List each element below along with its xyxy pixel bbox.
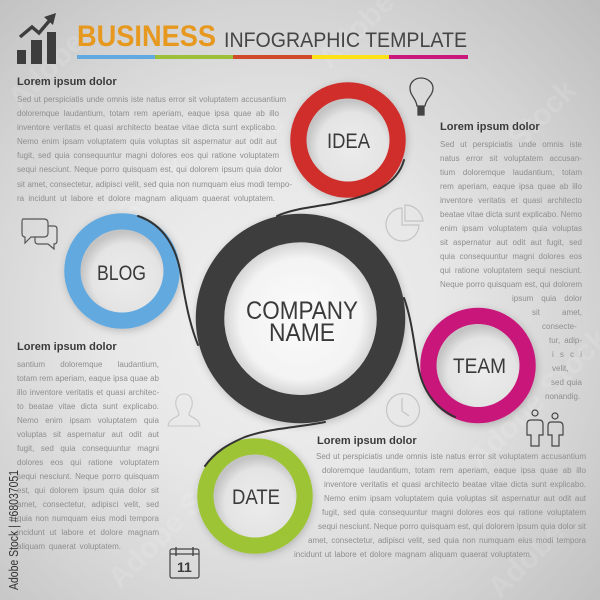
text block: top right: consecte- xyxy=(542,322,577,331)
text block: lower right xyxy=(294,452,586,559)
text block: lower left: est, qui dolorem ipsum quia dolor sit xyxy=(17,486,159,495)
text block: lower right: doloremque laudantium, totam rem aperiam, eaque ipsa quae ab illo xyxy=(322,466,586,475)
text block: lower right: sequi nesciunt. Neque porro quisquam est, qui dolorem ipsum quia dolor sit xyxy=(318,522,586,531)
text block: top right xyxy=(440,140,582,401)
text block: top left: Nemo enim ipsam voluptatem quia voluptas sit aspernatur aut odit aut xyxy=(17,137,277,146)
text block: top right: sit amet, xyxy=(532,308,582,317)
text block: top right: rem aperiam, eaque ipsa quae ab illo xyxy=(440,182,582,191)
central ring: company name: NAME xyxy=(269,319,335,347)
text block: lower left: amet, consectetur, adipisci velit, sed xyxy=(17,500,159,509)
text block: lower left: to beatae vitae dicta sunt explicabo. xyxy=(17,402,159,411)
text block: top right: sed quia xyxy=(551,378,582,387)
ring: idea: IDEA xyxy=(327,130,370,153)
text block: lower right: Sed ut perspiciatis unde omnis iste natus error sit voluptatem accusantium xyxy=(316,452,586,461)
central ring: company name xyxy=(210,228,391,409)
text block: lower right: incidunt ut labore et dolore magnam aliquam quaerat voluptatem. xyxy=(294,550,532,559)
ring: date xyxy=(206,446,304,546)
text block: top right: tur, adip- xyxy=(549,336,582,345)
watermark: Adobe Stock xyxy=(102,442,255,595)
watermark: Adobe Stock xyxy=(262,272,415,425)
text block: top right: beatae vitae dicta sunt explicabo. Nemo xyxy=(440,210,582,219)
text block: top left: sit amet, consectetur, adipisci velit, sed quia non numquam eius modi tempo- xyxy=(17,180,292,189)
ring: idea xyxy=(298,90,398,190)
icon: light bulb xyxy=(410,78,433,115)
icon: chart logo xyxy=(17,13,56,64)
text block: top right: natus error sit voluptatem accusan- xyxy=(440,154,582,163)
heading: top left: Lorem ipsum dolor xyxy=(17,76,117,88)
ring: blog: BLOG xyxy=(97,262,146,285)
text block: lower left: fugit, sed quia consequuntur magni xyxy=(17,444,159,453)
text block: top left: doloremque laudantium, totam rem aperiam, eaque ipsa quae ab illo xyxy=(17,109,279,118)
text block: top right: enim ipsam voluptatem quia voluptas xyxy=(440,224,582,233)
text block: lower left: sequi nesciunt. Neque porro quisquam xyxy=(17,472,159,481)
heading: top right: Lorem ipsum dolor xyxy=(440,121,540,133)
text block: lower left xyxy=(17,360,159,551)
text block: lower right: amet, consectetur, adipisci velit, sed quia non numquam eius modi tempora xyxy=(308,536,586,545)
text block: lower left: illo inventore veritatis et quasi architec- xyxy=(17,388,159,397)
text block: top right: inventore veritatis et quasi architecto xyxy=(440,196,582,205)
title: infographic template: INFOGRAPHIC TEMPLATE xyxy=(224,29,467,52)
heading: lower left: Lorem ipsum dolor xyxy=(17,341,117,353)
text block: lower left: voluptas sit aspernatur aut odit aut xyxy=(17,430,159,439)
text block: lower left: santium doloremque laudantium, xyxy=(17,360,159,369)
icon: person xyxy=(168,394,200,426)
watermark: Adobe xyxy=(202,106,291,195)
text block: lower right: Nemo enim ipsam voluptatem quia voluptas sit aspernatur aut odit aut xyxy=(324,494,586,503)
ring: blog xyxy=(72,222,172,320)
text block: top left: ra incidunt ut labore et dolore magnam aliquam quaerat voluptatem. xyxy=(17,194,275,203)
heading: lower right: Lorem ipsum dolor xyxy=(317,435,417,447)
text block: lower right: fugit, sed quia consequuntur magni dolores eos qui ratione voluptatem xyxy=(322,508,586,517)
icon: clock xyxy=(386,394,420,426)
ring: team xyxy=(428,316,528,415)
text block: top right: i s c i xyxy=(552,350,582,359)
icon: speech bubbles xyxy=(22,219,57,249)
watermark: Adobe xyxy=(2,26,91,115)
connector curves xyxy=(138,160,455,466)
text block: lower left: Nemo enim ipsam voluptatem quia xyxy=(17,416,159,425)
title: business: BUSINESS xyxy=(77,20,216,53)
icon: pie chart xyxy=(386,205,423,241)
text block: lower left: dolores eos qui ratione voluptatem xyxy=(17,458,159,467)
ring: team: TEAM xyxy=(453,355,506,378)
ring: date: DATE xyxy=(232,486,280,509)
text block: lower left: aliquam quaerat voluptatem. xyxy=(17,542,121,551)
text block: top left xyxy=(17,95,292,203)
text block: top right: sit aspernatur aut odit aut fugit, sed xyxy=(440,238,582,247)
text block: top right: tium doloremque laudantium, totam xyxy=(440,168,582,177)
text block: top left: fugit, sed quia consequuntur magni dolores eos qui ratione voluptatem xyxy=(17,151,279,160)
text block: top right: ipsum quia dolor xyxy=(512,294,582,303)
text block: lower right: inventore veritatis et quasi architecto beatae vitae dicta sunt explicabo. xyxy=(324,480,586,489)
text block: lower left: totam rem aperiam, eaque ipsa quae ab xyxy=(17,374,159,383)
text block: lower left: quia non numquam eius modi tempora xyxy=(17,514,159,523)
text block: top right: Neque porro quisquam est, qui dolorem xyxy=(440,280,582,289)
icon: calendar: 11 xyxy=(177,559,192,575)
icon: two people xyxy=(527,410,563,446)
text block: top left: inventore veritatis et quasi architecto beatae vitae dicta sunt explicabo. xyxy=(17,123,277,132)
title colour bar xyxy=(77,55,468,59)
text block: top right: quia consequuntur magni dolores eos xyxy=(440,252,582,261)
watermark: Stock xyxy=(502,74,583,155)
watermark: Stock xyxy=(112,149,193,230)
text block: top right: qui ratione voluptatem sequi nesciunt. xyxy=(440,266,582,275)
text block: top left: Sed ut perspiciatis unde omnis iste natus error sit voluptatem accusantium xyxy=(17,95,286,104)
central ring: company name: COMPANY xyxy=(246,297,358,325)
icon: calendar xyxy=(170,547,199,578)
text block: top right: velit, xyxy=(552,364,568,373)
text block: top left: sequi nesciunt. Neque porro quisquam est, qui dolorem ipsum quia dolor xyxy=(17,165,282,174)
text block: top right: nonandig. xyxy=(545,392,580,401)
text block: top right: Sed ut perspiciatis unde omnis iste xyxy=(440,140,582,149)
text block: lower left: incidunt ut labore et dolore magnam xyxy=(17,528,159,537)
stock credit: Adobe Stock | #68037051 xyxy=(7,470,21,590)
